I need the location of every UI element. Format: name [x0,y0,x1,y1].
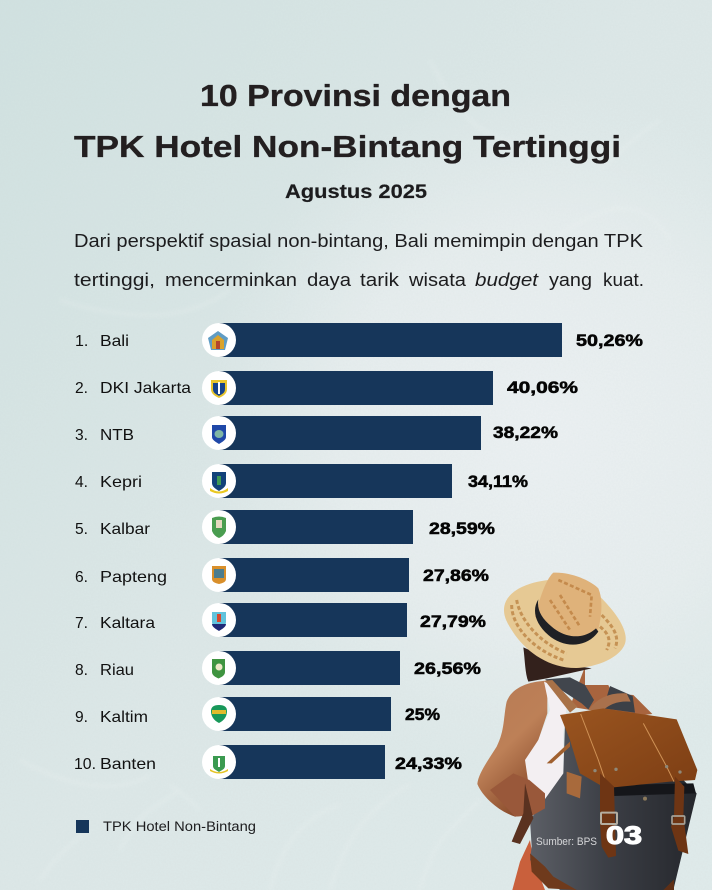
row: Kaltara: 7. [75,615,88,632]
row: Bali: 50,26% [576,331,643,350]
row: Riau: 8. [75,662,88,679]
dark band under flap [610,783,696,796]
row: NTB: 38,22% [493,423,558,442]
row: Bali [75,323,643,357]
skirt [512,840,545,890]
row: Papteng [75,558,489,592]
backpack body [530,723,697,890]
intro paragraph: yang [549,270,592,290]
neck and back skin [570,667,652,717]
row: Kalbar: Kalbar [100,521,151,538]
row: DKI Jakarta: DKI Jakarta [100,380,191,397]
row: Kaltim: 9. [75,709,88,726]
intro paragraph: daya [307,270,352,290]
row: DKI Jakarta [75,371,578,405]
hat band [535,599,598,645]
row: Kalbar [75,510,495,544]
row: Banten: Banten [100,756,156,773]
row: Kaltim [75,697,440,731]
gray shoulder straps [545,677,594,709]
hand [490,773,545,817]
title: TPK Hotel Non-Bintang Tertinggi [74,129,621,164]
brown shoulder strap [545,680,577,713]
intro paragraph: budget [475,270,539,290]
row: Kaltara [75,603,486,637]
row: Riau: Riau [100,662,134,679]
title: 10 Provinsi dengan [200,78,511,113]
hat brim [504,580,626,668]
row: Bali: 1. [75,333,88,350]
legend: TPK Hotel Non-Bintang [103,819,256,834]
row: Kepri: Kepri [100,474,142,491]
row: DKI Jakarta: 2. [75,380,88,397]
row: NTB: NTB [100,427,134,444]
row: Kalbar: 28,59% [429,519,495,538]
row: Banten [74,745,462,779]
row: Kaltim: 25% [405,705,440,724]
row: NTB: 3. [75,427,88,444]
intro paragraph: tertinggi, [74,270,155,290]
row: NTB [75,416,558,450]
row: Kepri [75,464,528,498]
row: Bali: Bali [100,333,129,350]
row: Riau: 26,56% [414,659,481,678]
source note: Sumber: BPS [536,836,597,848]
arm [477,681,547,817]
hair [523,647,592,682]
row: Riau [75,651,481,685]
row: Kaltim: Kaltim [100,709,148,726]
row: Banten: 24,33% [395,754,462,773]
intro paragraph: kuat. [603,270,644,290]
intro paragraph [74,231,644,290]
title [74,78,621,164]
subtitle: period: Agustus 2025 [285,182,427,203]
row: Papteng: 27,86% [423,566,489,585]
white top [525,682,567,817]
row: DKI Jakarta: 40,06% [507,378,578,397]
row: Kepri: 34,11% [468,472,528,491]
bar chart [74,323,643,779]
row: Kalbar: 5. [75,521,88,538]
intro paragraph: mencerminkan [165,270,297,290]
row: Kaltara: Kaltara [100,615,155,632]
illustration: traveller with hat and backpack [477,573,697,890]
row: Kepri: 4. [75,474,88,491]
row: Kaltara: 27,79% [420,612,486,631]
lower leather trim [530,853,577,890]
intro paragraph: tarik [360,270,400,290]
intro paragraph: Dari perspektif spasial non-bintang, Bali memimpin dengan TPK [74,231,643,251]
hat crown [535,573,601,640]
page number: 03 [606,822,642,850]
row: Banten: 10. [74,756,96,773]
front buckle straps [600,773,616,858]
backpack flap [560,708,697,787]
row: Papteng: 6. [75,569,88,586]
intro paragraph: wisata [408,270,467,290]
row: Papteng: Papteng [100,569,167,586]
